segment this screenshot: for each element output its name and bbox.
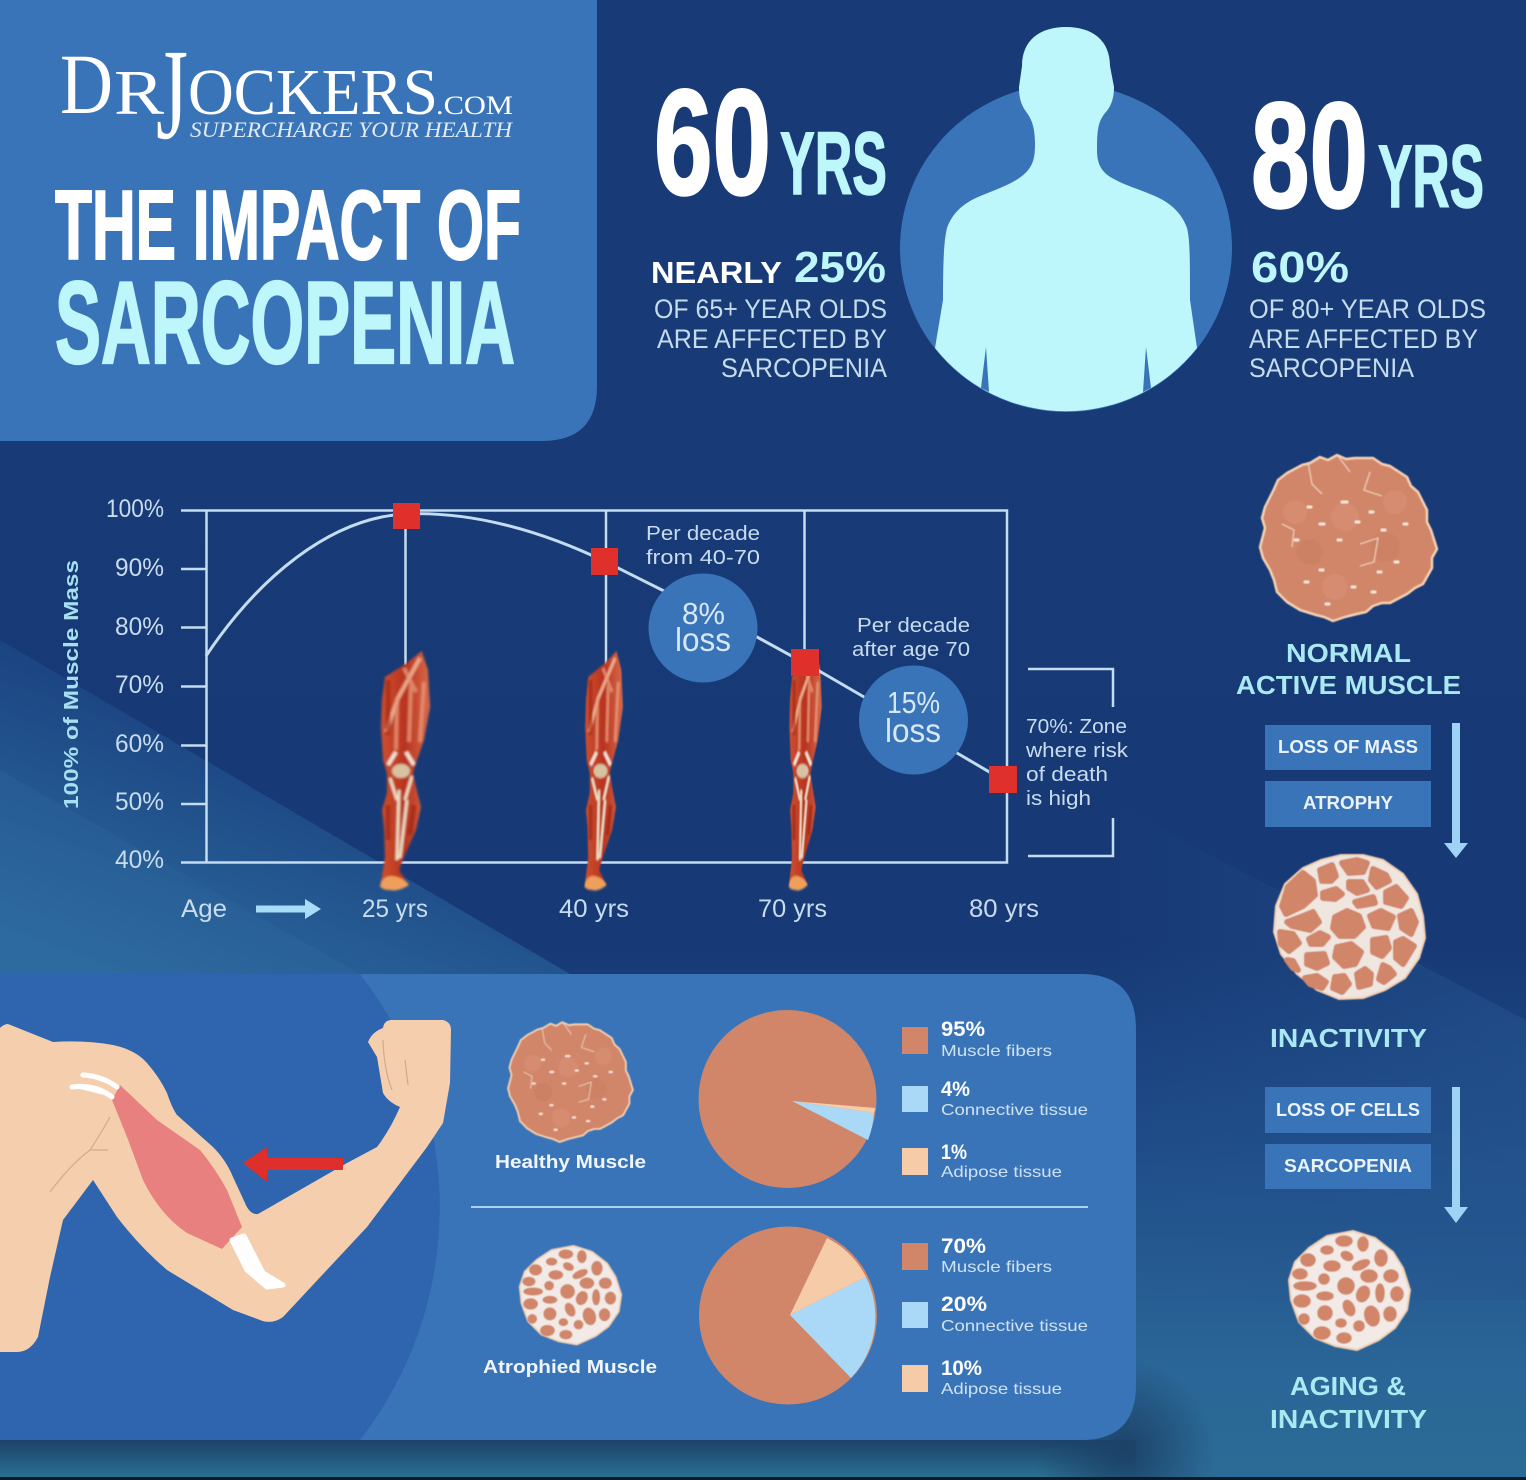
- legend: atrophied composition: [902, 1235, 1088, 1398]
- panel: 60 yrs statistic: YRS: [780, 113, 887, 213]
- arrow: down: [1444, 1087, 1468, 1223]
- panel: 60 yrs statistic: NEARLY: [651, 255, 782, 290]
- icon: normal muscle cross-section: [1260, 455, 1437, 621]
- y axis labels: 100%: [106, 495, 164, 523]
- data marker 25 yrs: [393, 503, 420, 529]
- legend: atrophied composition: Connective tissue: [941, 1318, 1088, 1335]
- panel: 80 yrs statistic: OF 80+ YEAR OLDS: [1249, 294, 1486, 324]
- legend: healthy composition: [902, 1018, 1088, 1181]
- panel: title: [0, 0, 597, 441]
- tendons: [72, 1075, 283, 1287]
- callout: 8% loss: loss: [675, 621, 731, 658]
- y axis labels: 90%: [115, 554, 164, 582]
- arrow: red: [243, 1147, 343, 1182]
- logo: D: [60, 36, 113, 132]
- callout: death risk zone: [1025, 669, 1129, 856]
- icon: atrophied muscle: [520, 1246, 621, 1345]
- box: loss of mass: LOSS OF MASS: [1278, 737, 1418, 757]
- panel: muscle composition: [0, 974, 1136, 1440]
- chart: muscle mass by age: [61, 495, 1129, 923]
- callout: 15% loss: Per decade: [857, 615, 970, 637]
- x axis labels: 40 yrs: [559, 895, 629, 923]
- legend: healthy composition: Adipose tissue: [941, 1164, 1062, 1181]
- leg at 25 yrs: [380, 651, 430, 890]
- callout: death risk zone: is high: [1026, 788, 1091, 810]
- logo: SUPERCHARGE YOUR HEALTH: [190, 117, 513, 142]
- x axis labels: Age: [181, 895, 227, 923]
- y axis labels: 50%: [115, 788, 164, 816]
- box: loss of cells: LOSS OF CELLS: [1276, 1100, 1420, 1120]
- callout: 15% loss: loss: [885, 712, 941, 749]
- y axis labels: [106, 495, 164, 874]
- x axis labels: [181, 895, 1039, 923]
- logo: OCKERS: [188, 56, 438, 129]
- heading: normal active muscle: [1236, 638, 1461, 700]
- callout: 15% loss: after age 70: [852, 639, 970, 661]
- leg at 70 yrs: [789, 651, 822, 890]
- panel: 60 yrs statistic: [651, 58, 887, 383]
- heading: inactivity: INACTIVITY: [1270, 1023, 1427, 1053]
- callout: 15% loss: [852, 615, 970, 774]
- pie chart: healthy composition: [698, 1010, 876, 1188]
- y axis labels: 60%: [115, 730, 164, 758]
- heading: the impact of: THE IMPACT OF: [55, 170, 521, 280]
- box: atrophy: [1265, 781, 1431, 827]
- legend: healthy composition: 4%: [941, 1078, 970, 1101]
- leg at 40 yrs: [584, 651, 623, 890]
- panel: 60 yrs statistic: OF 65+ YEAR OLDS: [654, 294, 887, 324]
- panel: muscle progression: [1236, 455, 1468, 1434]
- logo: R: [114, 57, 164, 128]
- pie chart: atrophied composition: [699, 1226, 877, 1404]
- heading: aging and inactivity: AGING &: [1290, 1371, 1406, 1401]
- x axis labels: 70 yrs: [758, 895, 827, 923]
- heading: sarcopenia: SARCOPENIA: [55, 257, 515, 388]
- box: atrophy: ATROPHY: [1303, 793, 1393, 813]
- callout: death risk zone: 70%: Zone: [1026, 716, 1127, 738]
- legend: atrophied composition: 10%: [941, 1357, 982, 1380]
- x axis labels: 25 yrs: [362, 895, 428, 923]
- callout: 8% loss: from 40-70: [646, 547, 760, 569]
- box: loss of cells: [1265, 1087, 1431, 1133]
- logo: [60, 23, 513, 167]
- panel: 60 yrs statistic: 25%: [794, 243, 886, 292]
- callout: 8% loss: 8%: [682, 596, 725, 631]
- logo: .COM: [436, 91, 513, 120]
- heading: aging and inactivity: [1270, 1371, 1427, 1434]
- panel: 80 yrs statistic: SARCOPENIA: [1249, 353, 1414, 383]
- arrow: down: [1444, 723, 1468, 858]
- icon: healthy muscle: [508, 1022, 633, 1142]
- panel: 60 yrs statistic: SARCOPENIA: [721, 353, 887, 383]
- callout: 8% loss: [646, 523, 760, 682]
- callout: death risk zone: where risk: [1025, 740, 1129, 762]
- heading: aging and inactivity: INACTIVITY: [1270, 1404, 1427, 1434]
- box: sarcopenia: [1265, 1144, 1431, 1189]
- box: loss of mass: [1265, 725, 1431, 770]
- data marker 70 yrs: [791, 649, 819, 676]
- legend: healthy composition: 95%: [941, 1018, 985, 1041]
- legend: healthy composition: 1%: [941, 1141, 967, 1164]
- y axis labels: 80%: [115, 613, 164, 641]
- biceps muscle: [112, 1085, 242, 1249]
- callout: 8% loss: Per decade: [646, 523, 760, 545]
- panel: 60 yrs statistic: ARE AFFECTED BY: [657, 324, 887, 354]
- panel: 80 yrs statistic: ARE AFFECTED BY: [1249, 324, 1478, 354]
- callout: 15% loss: 15%: [887, 685, 940, 720]
- legend: atrophied composition: Adipose tissue: [941, 1381, 1062, 1398]
- label: atrophied muscle: Atrophied Muscle: [483, 1357, 657, 1377]
- legend: healthy composition: Connective tissue: [941, 1102, 1088, 1119]
- icon: aged muscle cross-section: [1289, 1231, 1410, 1350]
- y axis labels: 70%: [115, 671, 164, 699]
- panel: 80 yrs statistic: 60%: [1251, 243, 1349, 292]
- muscle mass curve: [206, 514, 1003, 780]
- y axis labels: 40%: [115, 846, 164, 874]
- data marker 80 yrs: [989, 766, 1017, 793]
- icon: inactive muscle cross-section: [1274, 855, 1425, 999]
- panel: 80 yrs statistic: 80: [1251, 71, 1368, 239]
- heading: normal active muscle: ACTIVE MUSCLE: [1236, 670, 1461, 700]
- box: sarcopenia: SARCOPENIA: [1284, 1156, 1412, 1176]
- legend: atrophied composition: Muscle fibers: [941, 1259, 1052, 1276]
- legend: healthy composition: Muscle fibers: [941, 1043, 1052, 1060]
- illustration: flexed arm: [0, 1020, 451, 1352]
- y axis title: 100% of Muscle Mass: [61, 560, 83, 809]
- panel: 60 yrs statistic: 60: [654, 58, 771, 226]
- x axis labels: 80 yrs: [969, 895, 1039, 923]
- panel: 80 yrs statistic: [1249, 71, 1486, 383]
- callout: death risk zone: of death: [1026, 764, 1108, 786]
- data marker 40 yrs: [591, 548, 618, 575]
- heading: normal active muscle: NORMAL: [1286, 638, 1411, 668]
- icon: body silhouette in circle: [900, 27, 1232, 412]
- legend: atrophied composition: 20%: [941, 1293, 987, 1316]
- logo: J: [156, 23, 188, 167]
- legend: atrophied composition: 70%: [941, 1235, 986, 1258]
- label: healthy muscle: Healthy Muscle: [495, 1152, 646, 1172]
